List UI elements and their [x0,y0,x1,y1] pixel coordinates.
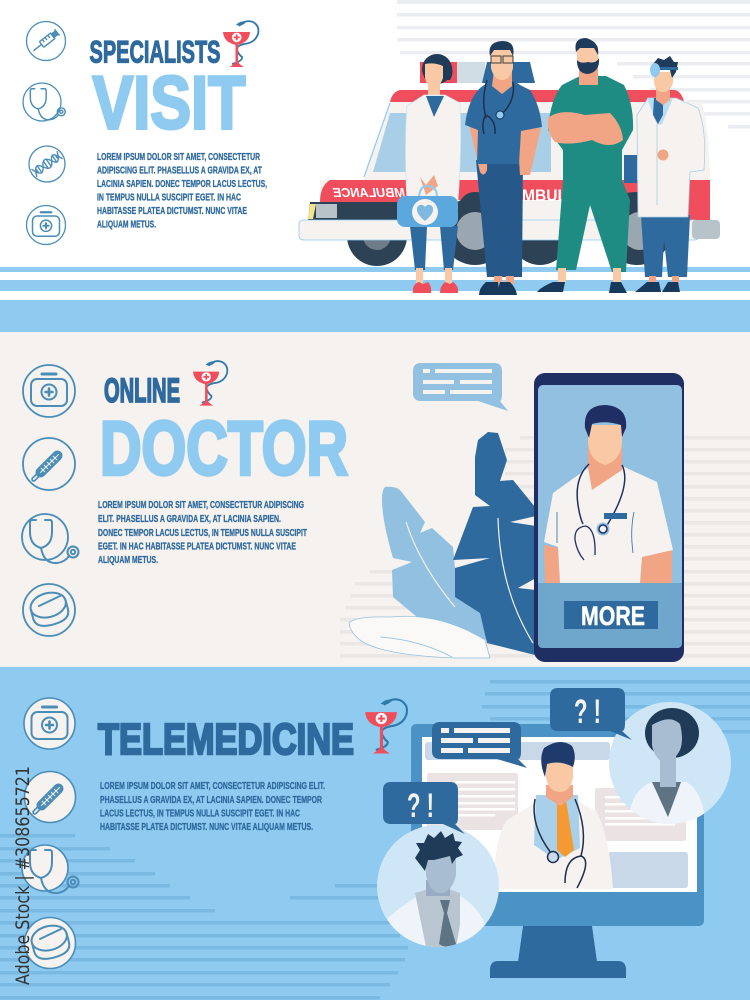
background stripes [397,0,750,128]
heading: specialists: SPECIALISTS [90,33,220,69]
text block: LOREM IPSUM DOLOR SIT AMET, CONSECTETUR ADIPISCING ELIT. [100,780,325,792]
icon: stethoscope [22,845,78,893]
stock id label: Adobe Stock | #308655721 [12,766,34,985]
icon: thermometer [23,438,75,490]
text block: ALIQUAM METUS. [97,218,156,230]
panel: online doctor [0,332,750,667]
icon: pill [23,584,75,636]
icon: first aid kit [23,365,75,417]
illustration: smartphone with doctor [534,373,684,662]
icon: pill [24,918,76,968]
text block: HABITASSE PLATEA DICTUMST. NUNC VITAE ALIQUAM METUS. [100,821,313,833]
text block: ADIPISCING ELIT. PHASELLUS A GRAVIDA EX, AT [97,164,262,176]
figure: female doctor with bag [397,54,461,293]
text block [97,151,267,230]
text block: PHASELLUS A GRAVIDA EX, AT LACINIA SAPIEN. DONEC TEMPOR [100,794,322,806]
background stripes [340,436,750,658]
speech bubble: question left: ? ! [407,787,434,825]
icon: syringe [26,22,66,60]
speech bubble: question right: ? ! [574,693,601,731]
panel: specialists visit [0,0,750,332]
speech bubble: question left [383,782,465,834]
panel: telemedicine [0,667,750,1000]
figure: doctor with head mirror and clipboard [624,56,705,292]
heading: telemedicine: TELEMEDICINE [98,715,354,764]
text block: HABITASSE PLATEA DICTUMST. NUNC VITAE [97,205,247,217]
icon: first aid kit [24,698,75,749]
figure: bearded doctor in green scrubs [537,38,633,293]
stripes under the ambulance [0,267,750,332]
text block: EGET. IN HAC HABITASSE PLATEA DICTUMST. NUNC VITAE [98,540,296,552]
illustration: monitor [411,724,704,978]
mirrored lettering: MBULANCE [333,185,405,200]
background stripes [0,680,750,1000]
button: more: MORE [581,601,645,631]
icon: stethoscope [23,83,65,121]
text block: ALIQUAM METUS. [98,554,158,566]
patient: man [377,825,499,950]
icon: bowl of hygieia [365,699,407,753]
text block [100,780,325,833]
icon: first aid kit [26,206,66,244]
heading: online: ONLINE [104,372,180,410]
speech bubble: question right [550,688,632,740]
icon: stethoscope [22,514,78,563]
icon: dna [29,146,65,182]
icon: thermometer [24,772,76,822]
figure: male doctor in blue scrubs [465,41,542,295]
patient: woman [609,702,731,824]
doctor on monitor [493,742,613,889]
illustration: ambulance [299,62,720,266]
lettering on side: MBUL [522,186,567,205]
text block: LACUS LECTUS, IN TEMPUS NULLA SUSCIPIT EGET. IN HAC [100,808,300,820]
text block: LACINIA SAPIEN. DONEC TEMPOR LACUS LECTUS, [97,178,267,190]
speech bubble [413,363,508,411]
text block: LOREM IPSUM DOLOR SIT AMET, CONSECTETUR ADIPISCING [98,499,304,511]
text block: DONEC TEMPOR LACUS LECTUS, IN TEMPUS NULLA SUSCIPIT [98,527,307,539]
illustration: leaves [349,432,536,658]
heading: doctor: DOCTOR [100,406,348,492]
icon: bowl of hygieia [193,361,227,406]
text block [98,499,307,566]
doctor on screen [544,405,673,583]
text block: IN TEMPUS NULLA SUSCIPIT EGET. IN HAC [97,192,241,204]
speech bubble: text lines [432,722,527,768]
text block: LOREM IPSUM DOLOR SIT AMET, CONSECTETUR [97,151,260,163]
text block: ELIT. PHASELLUS A GRAVIDA EX, AT LACINIA SAPIEN. [98,513,281,525]
icon: bowl of hygieia [223,21,258,67]
heading: visit: VISIT [92,60,246,144]
